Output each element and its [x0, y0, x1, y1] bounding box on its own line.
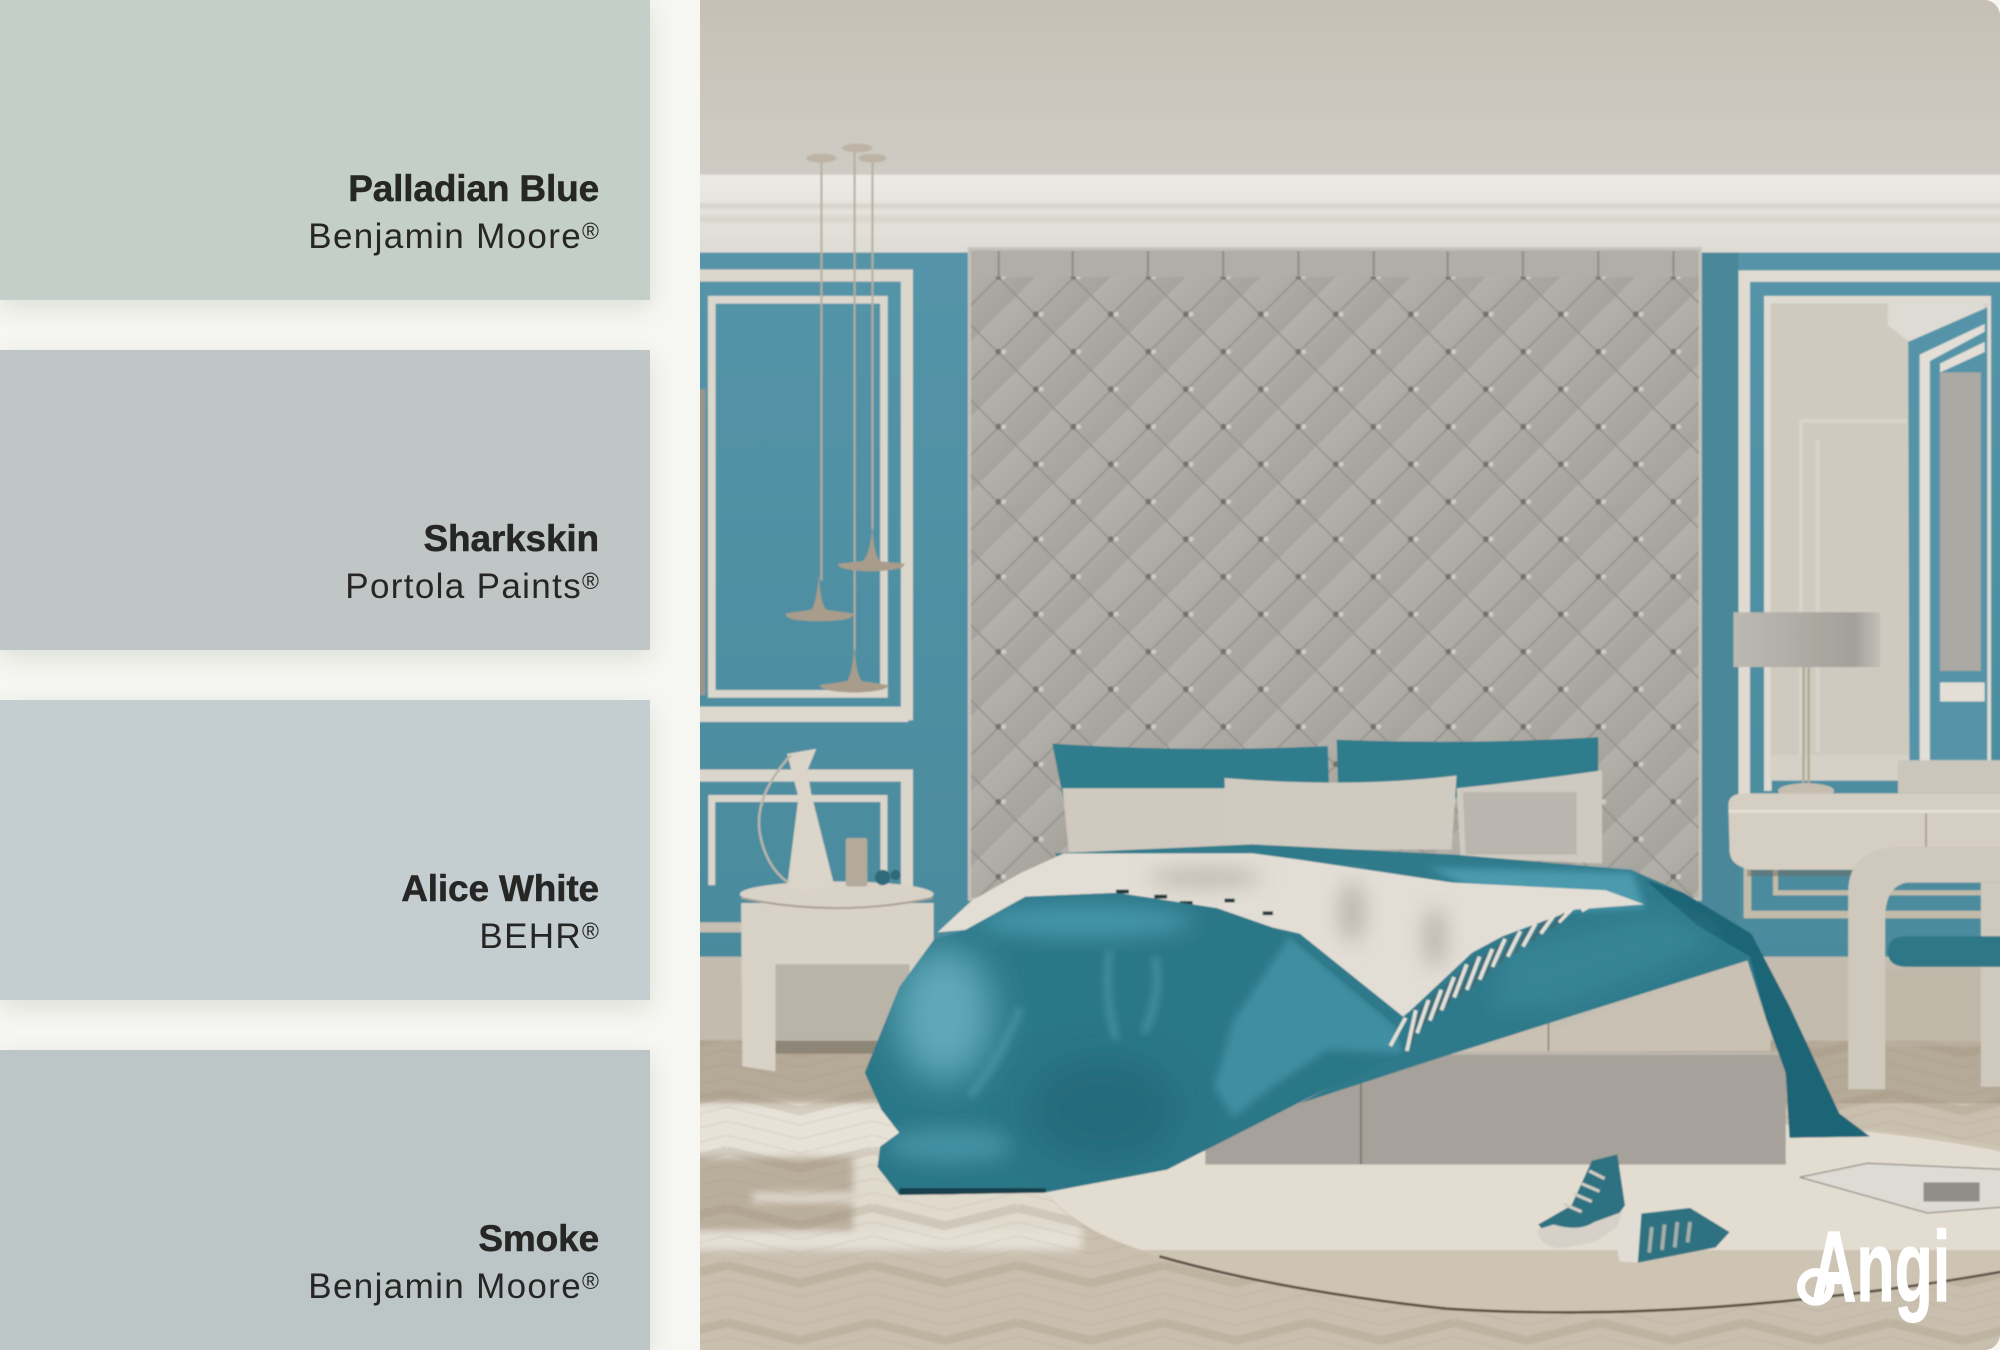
- mattress: [1460, 1022, 1771, 1052]
- magazine: [1800, 1163, 2000, 1213]
- color name: Alice White: [401, 868, 599, 909]
- dark right drape: [1645, 880, 1870, 1138]
- white throw blanket: [938, 853, 1644, 1017]
- headboard: [969, 249, 1700, 899]
- right wall molding: [1744, 276, 2000, 816]
- sneaker flat: [1617, 1208, 1730, 1263]
- color name: Sharkskin: [423, 518, 599, 559]
- highlights: [1214, 936, 1403, 1117]
- color name: Smoke: [478, 1218, 599, 1259]
- brand: Benjamin Moore®: [308, 1267, 599, 1306]
- pendant lamps: [786, 143, 904, 693]
- blanket shading: [1148, 869, 1446, 968]
- mirror reflection: [1770, 304, 1987, 781]
- sunlight patches: [695, 1103, 1083, 1250]
- color name: Palladian Blue: [348, 168, 599, 209]
- left wall molding lower: [695, 776, 907, 927]
- right wall dark strip: [1702, 253, 1738, 687]
- left wall molding upper: [695, 276, 908, 714]
- chair: [1848, 847, 2000, 1089]
- dark tassels: [1084, 892, 1273, 913]
- panel: bedroom illustration: [700, 0, 2000, 1350]
- dresser: [1728, 793, 2000, 876]
- teal pillows: [1052, 737, 1598, 801]
- vase: [759, 749, 901, 890]
- lower right molding: [1747, 867, 2000, 915]
- brand: Portola Paints®: [345, 567, 599, 606]
- left wall picture edge: [699, 389, 705, 695]
- panel: swatch Alice White: [0, 700, 650, 1000]
- wainscot: [695, 957, 2000, 1043]
- nightstand: [740, 881, 934, 1071]
- table lamp: [1733, 612, 1880, 798]
- blue wall: [695, 249, 2000, 958]
- blanket fringe: [1390, 903, 1594, 1051]
- round rug: [1043, 1117, 2000, 1312]
- sneakers: [1537, 1154, 1730, 1263]
- brand: BEHR®: [479, 917, 599, 956]
- duvet back and right drape: [1055, 844, 1870, 1138]
- stacked books: [1898, 760, 2000, 793]
- panel: swatch Sharkskin: [0, 350, 650, 650]
- brand: Benjamin Moore®: [308, 217, 599, 256]
- light duvet side: [1509, 927, 1683, 997]
- sneaker upright: [1537, 1154, 1625, 1249]
- crown molding: [695, 175, 2000, 253]
- Angi logo: [1801, 1211, 1950, 1323]
- panel: swatch Smoke: [0, 1050, 650, 1350]
- floor: [695, 1040, 2000, 1350]
- panel: swatch Palladian Blue: [0, 0, 650, 300]
- light duvet top: [1429, 867, 1645, 911]
- bed base: [1205, 1054, 1786, 1165]
- duvet front lump: [865, 893, 1403, 1195]
- cream pillows: [1062, 770, 1602, 864]
- ceiling: [695, 0, 2000, 176]
